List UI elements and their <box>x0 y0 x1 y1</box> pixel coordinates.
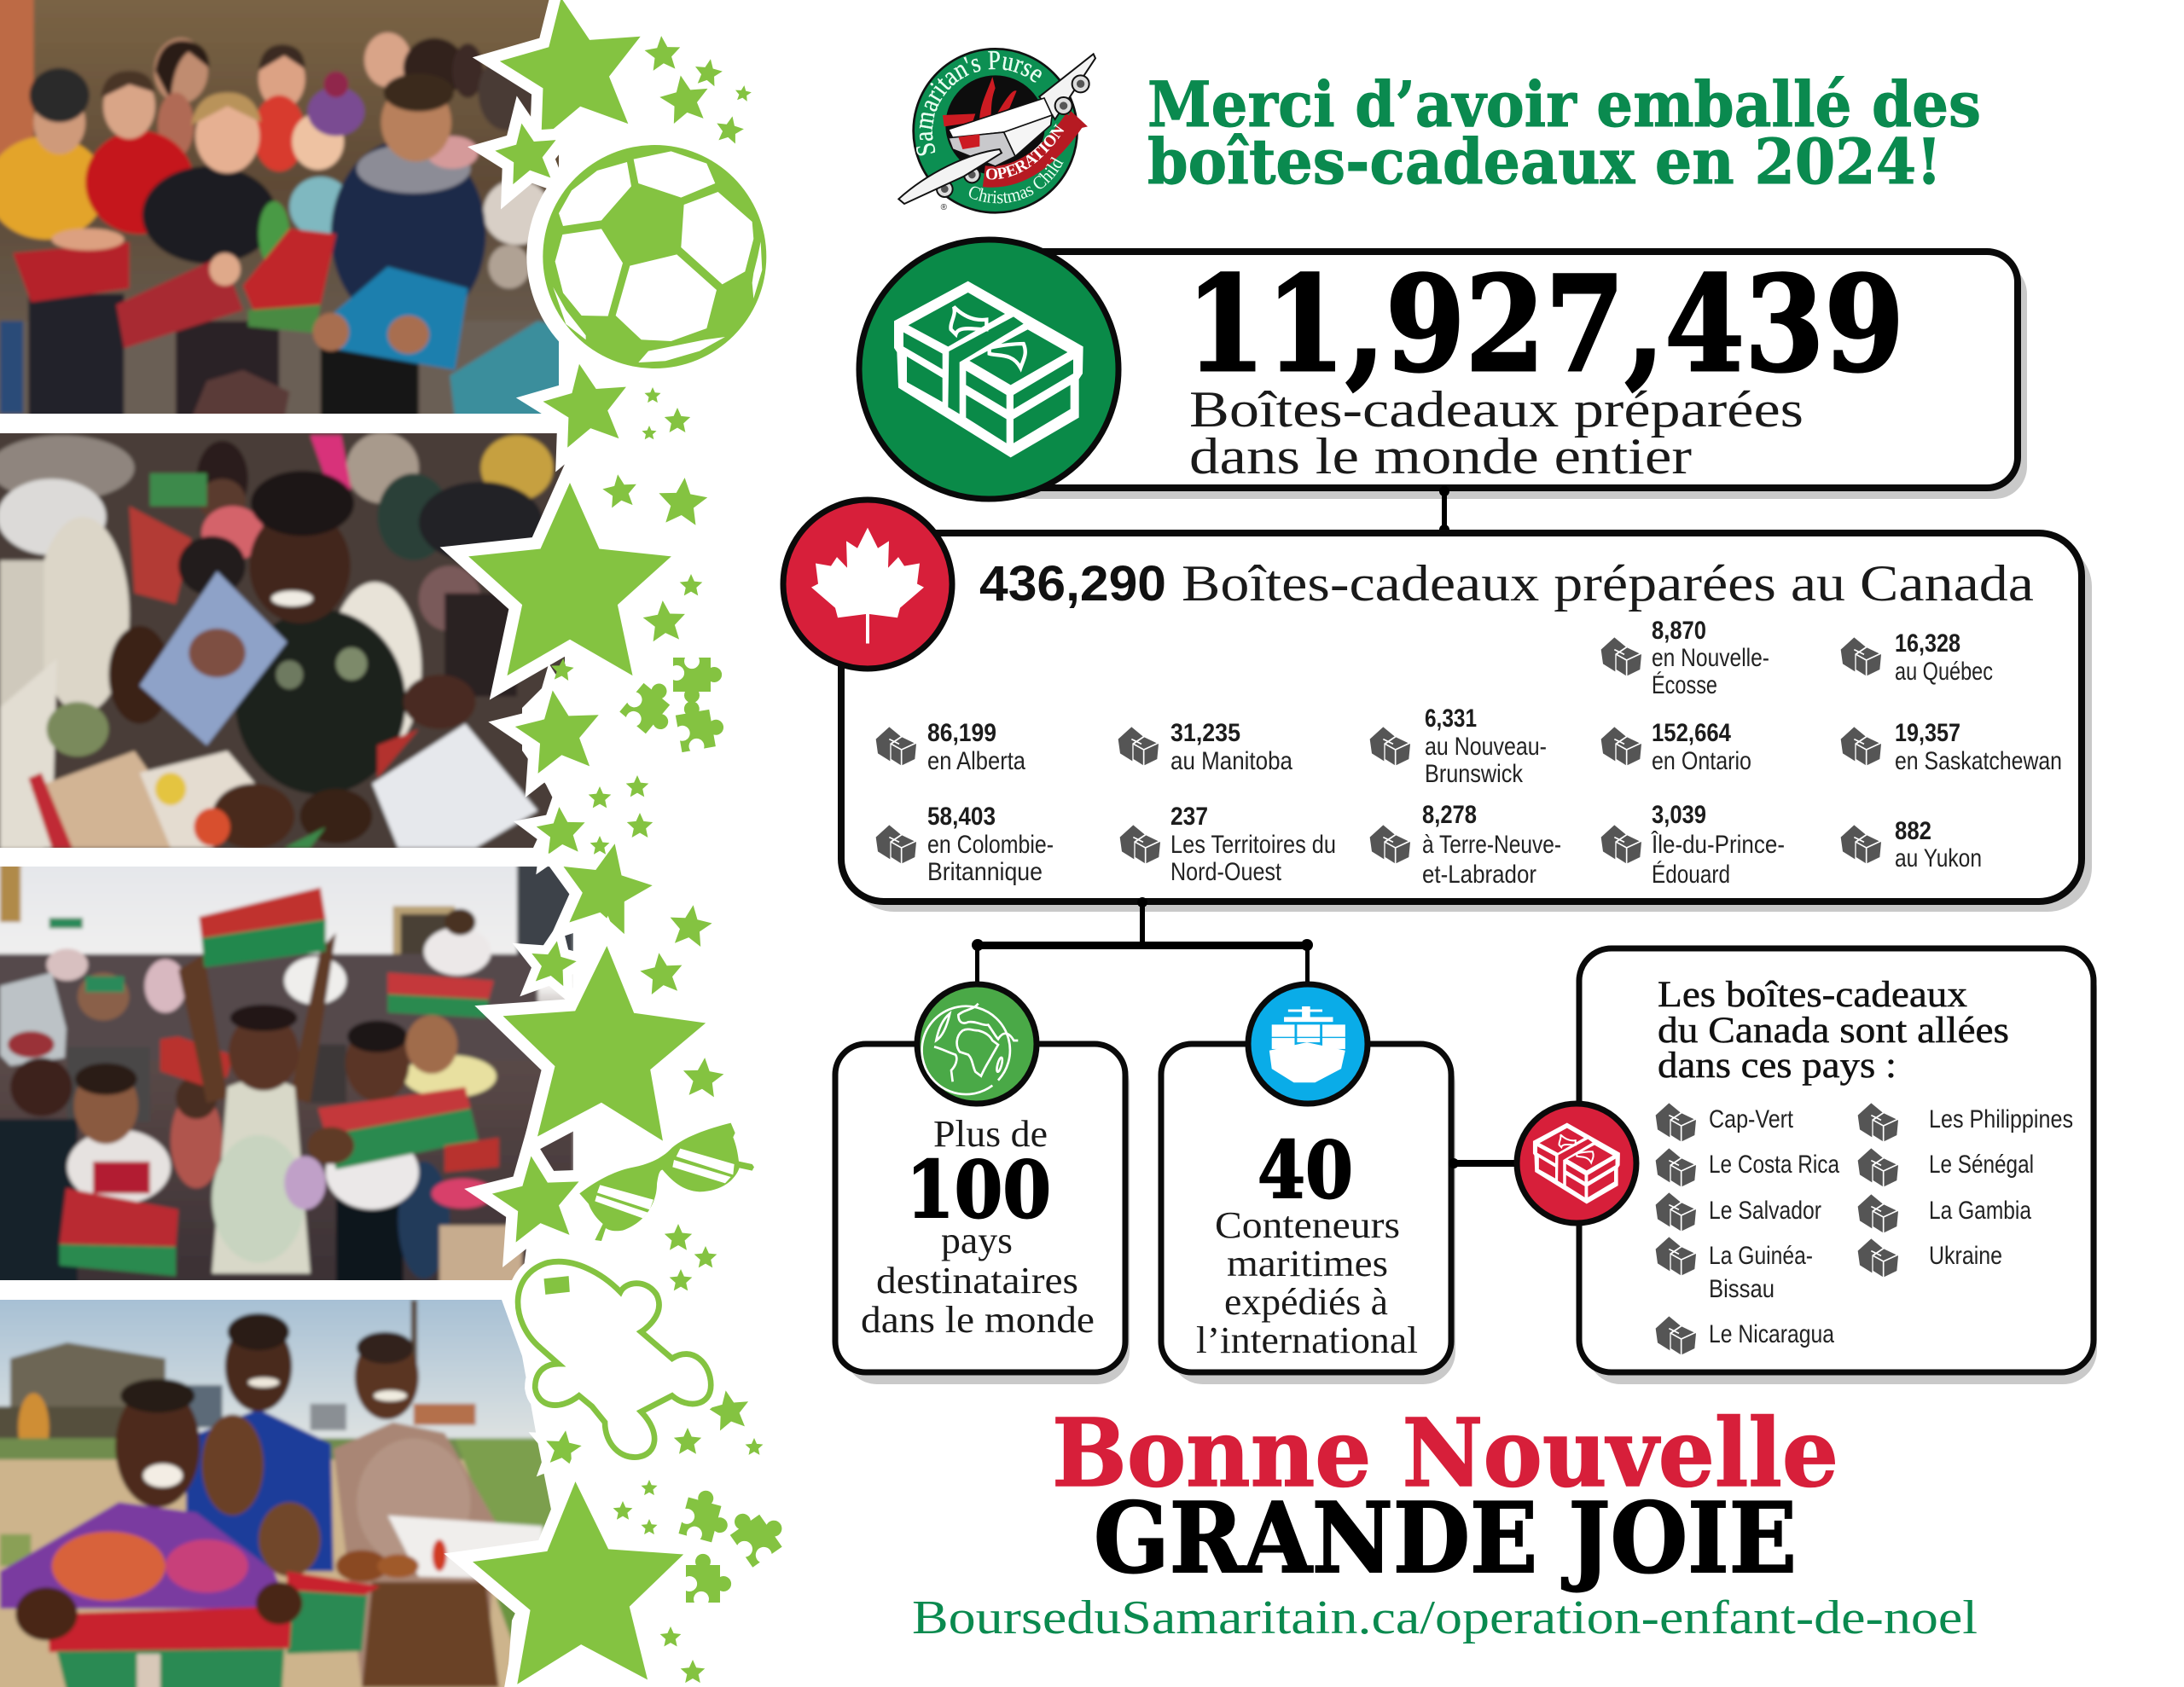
item: Ontario <box>1601 719 1751 775</box>
item: Nouveau-Brunswick <box>1370 704 1547 788</box>
stat text: 100 <box>906 1144 1051 1236</box>
heading <box>1658 975 2009 1086</box>
title: boîtes-cadeaux en 2024! <box>1147 125 1942 199</box>
icon: sunglasses <box>579 1123 754 1241</box>
photo: crowd of children holding red and green boxes overhead <box>0 858 574 1290</box>
country list: La Gambia <box>1929 1197 2031 1225</box>
logo: Samaritan's Purse Operation Christmas Child: Samaritan's Purse <box>916 51 1042 155</box>
item: Nouvelle-Écosse: en Nouvelle- <box>1652 644 1769 672</box>
stat text: dans le monde <box>861 1299 1095 1341</box>
icon: globe <box>917 984 1037 1104</box>
country list: La Guinéa- <box>1709 1242 1813 1270</box>
item: Nouvelle-Écosse: 8,870 <box>1652 617 1706 645</box>
item: Nouveau-Brunswick: 6,331 <box>1425 704 1477 733</box>
item: Ontario: en Ontario <box>1652 747 1751 775</box>
title <box>1147 68 1981 199</box>
stat text: 40 <box>1258 1124 1353 1216</box>
stat text: l’international <box>1196 1319 1418 1361</box>
icon: soccer ball <box>526 129 782 385</box>
footer heading: Grande Joie: GRANDE JOIE <box>1094 1481 1797 1595</box>
item: Terre-Neuve-et-Labrador: à Terre-Neuve- <box>1422 831 1561 859</box>
item: Yukon <box>1841 817 1982 872</box>
item: Alberta: en Alberta <box>927 747 1025 775</box>
stat text: expédiés à <box>1224 1281 1388 1323</box>
heading: Les boîtes-cadeaux <box>1658 975 1967 1015</box>
item: Terre-Neuve-et-Labrador <box>1370 801 1561 889</box>
heading: Boîtes-cadeaux préparées au Canada <box>1182 555 2034 612</box>
item: Île-du-Prince-Édouard <box>1601 801 1785 889</box>
country list: Ukraine <box>1929 1242 2002 1270</box>
stat text: maritimes <box>1227 1243 1388 1284</box>
item: Alberta: 86,199 <box>927 719 996 747</box>
icon: green circle with gift boxes <box>859 240 1118 499</box>
item: Colombie-Britannique <box>876 803 1054 886</box>
item: Saskatchewan: 19,357 <box>1895 719 1960 747</box>
description: dans le monde entier <box>1189 428 1692 484</box>
stat text: destinataires <box>876 1260 1078 1301</box>
country list: Bissau <box>1709 1275 1774 1303</box>
heading: du Canada sont allées <box>1658 1011 2009 1051</box>
country list: Le Costa Rica <box>1709 1151 1839 1179</box>
logo: Samaritan's Purse Operation Christmas Child: ® <box>941 203 948 212</box>
country list: Les Philippines <box>1929 1105 2073 1133</box>
item: Terre-Neuve-et-Labrador: 8,278 <box>1422 801 1477 829</box>
item: Colombie-Britannique: 58,403 <box>927 803 996 831</box>
country list: Le Sénégal <box>1929 1151 2034 1179</box>
item: Alberta <box>876 719 1025 775</box>
item: Nouveau-Brunswick: Brunswick <box>1425 760 1524 788</box>
logo: Samaritan's Purse Operation Christmas Child <box>897 48 1097 214</box>
item: Québec: 16,328 <box>1895 629 1960 658</box>
icon: gift boxes in red circle <box>1517 1104 1636 1223</box>
item: Territoires du Nord-Ouest: Les Territoires du <box>1170 831 1336 859</box>
item: Québec: au Québec <box>1895 658 1993 686</box>
heading: 436,290 <box>979 556 1166 612</box>
stat text <box>861 1113 1095 1341</box>
item: Manitoba <box>1118 719 1292 775</box>
photo: smiling girl opening a striped shoebox gift <box>0 430 574 855</box>
decorative stars with white outlines over photos <box>468 0 708 1685</box>
description: Boîtes-cadeaux préparées <box>1189 381 1804 438</box>
item: Nouveau-Brunswick: au Nouveau- <box>1425 733 1547 761</box>
item: Manitoba: au Manitoba <box>1170 747 1292 775</box>
item: Terre-Neuve-et-Labrador: et-Labrador <box>1422 861 1536 889</box>
panel: worldwide total <box>859 240 2027 499</box>
item: Territoires du Nord-Ouest <box>1120 803 1336 886</box>
item: Colombie-Britannique: Britannique <box>927 858 1043 886</box>
panel: destination countries <box>1517 948 2097 1384</box>
item: Ontario: 152,664 <box>1652 719 1731 747</box>
item: Saskatchewan: en Saskatchewan <box>1895 747 2062 775</box>
item: Saskatchewan <box>1841 719 2062 775</box>
icon: gingerbread man outline <box>518 1261 711 1458</box>
icon: maple leaf in red circle <box>783 500 952 669</box>
description <box>1189 381 1804 484</box>
decorative small stars and puzzle pieces <box>550 34 792 1683</box>
country list: Le Nicaragua <box>1709 1320 1834 1348</box>
panel: countries reached <box>835 984 1130 1384</box>
country list: Cap-Vert <box>1709 1105 1794 1133</box>
item: Yukon: 882 <box>1895 817 1931 845</box>
item: Yukon: au Yukon <box>1895 844 1982 872</box>
item: Nouvelle-Écosse: Écosse <box>1652 671 1717 699</box>
item: Territoires du Nord-Ouest: Nord-Ouest <box>1170 858 1282 886</box>
country list: Le Salvador <box>1709 1197 1821 1225</box>
item: Île-du-Prince-Édouard: Édouard <box>1652 861 1730 889</box>
connector: Canada to stat panels <box>972 897 1313 988</box>
big number: 11,927,439 <box>1186 247 1904 402</box>
country list <box>1656 1103 2073 1355</box>
panel: shipping containers <box>1161 984 1455 1384</box>
title: Merci d’avoir emballé des <box>1147 68 1981 142</box>
heading: dans ces pays : <box>1658 1046 1896 1086</box>
item: Île-du-Prince-Édouard: 3,039 <box>1652 801 1706 829</box>
item: Québec <box>1841 629 1993 686</box>
icon: container ship <box>1248 984 1368 1104</box>
item: Colombie-Britannique: en Colombie- <box>927 831 1054 859</box>
stat text <box>1196 1124 1418 1361</box>
item: Territoires du Nord-Ouest: 237 <box>1170 803 1208 831</box>
item: Manitoba: 31,235 <box>1170 719 1240 747</box>
website URL: BourseduSamaritain.ca/operation-enfant-de-noel <box>912 1591 1978 1644</box>
stat text: Conteneurs <box>1215 1204 1400 1246</box>
stat text: pays <box>941 1220 1013 1261</box>
item: Nouvelle-Écosse <box>1601 617 1769 699</box>
item: Île-du-Prince-Édouard: Île-du-Prince- <box>1651 831 1785 859</box>
photo: three boys with plastic gift boxes outdoors <box>0 1295 574 1687</box>
connector: containers to destination countries <box>1449 1158 1520 1168</box>
logo: Samaritan's Purse Operation Christmas Child: OPERATION <box>986 123 1065 179</box>
footer heading: Bonne Nouvelle: Bonne Nouvelle <box>1052 1398 1838 1508</box>
logo: Samaritan's Purse Operation Christmas Child: Christmas Child <box>969 157 1064 203</box>
photo: children with shoebox gifts sitting on a bench <box>0 0 574 425</box>
stat text: Plus de <box>933 1113 1048 1155</box>
panel: Canada <box>783 500 2092 912</box>
connector: world to Canada <box>1439 486 1449 535</box>
